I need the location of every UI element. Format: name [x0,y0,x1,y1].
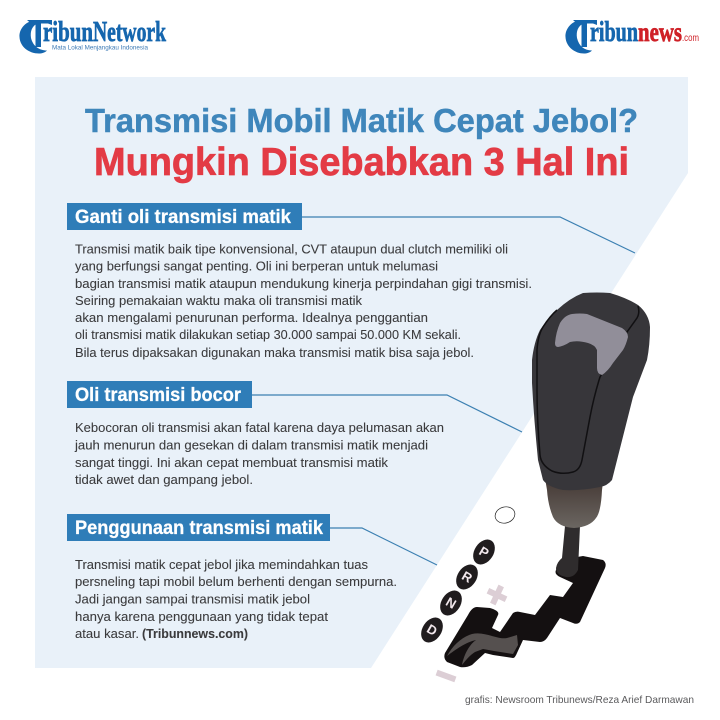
body text 3: Transmisi matik cepat jebol jika memindahkan tuas [75,557,368,572]
body text 1: yang berfungsi sangat penting. Oli ini berperan untuk melumasi [75,258,438,274]
body text 3: (Tribunnews.com) [142,626,248,641]
connector line 1 [302,217,635,253]
gear marking: D: D [424,621,440,639]
heading 2: Oli transmisi bocor [75,385,242,406]
body text 1: akan mengalami penurunan performa. Idealnya penggantian [75,310,428,325]
knob body [532,292,650,490]
knob seam [537,306,639,473]
body text 1: Seiring pemakaian waktu maka oli transmisi matik [75,293,363,308]
body text 3: hanya karena penggunaan yang tidak tepat [75,609,328,624]
heading 3: Penggunaan transmisi matik [75,518,323,539]
gear marking: N [436,587,466,619]
gear marking: P [469,536,499,568]
body text 2: tidak awet dan gampang jebol. [75,472,253,487]
body text 2: Kebocoran oli transmisi akan fatal karena daya pelumasan akan [75,420,444,435]
gear marking: P: P [476,543,492,561]
knob boot [545,478,603,528]
title [85,102,638,184]
heading 1: Ganti oli transmisi matik [75,207,291,228]
logo: TribunNetwork: Network [93,16,167,48]
logo: Tribunnews.com: news [638,17,682,47]
gear marking: R: R [459,568,475,586]
body text 2 [74,420,444,487]
plus sign [484,582,510,608]
section 1: ganti oli [67,203,635,360]
body text 1 [75,242,532,360]
shaft [556,526,580,577]
body text 3 [75,557,397,641]
slot highlight [447,633,518,665]
body text 1: bagian transmisi matik ataupun mendukung kinerja perpindahan gigi transmisi. [75,276,532,291]
section 2: oli bocor [67,381,522,487]
body text 2: sangat tinggi. Ini akan cepat membuat transmisi matik [75,455,389,470]
logo: Tribunnews.com: ribun [590,17,638,48]
logo: TribunNetwork: Mata Lokal Menjangkau Indonesia [52,44,148,52]
logo: Tribunnews.com [565,17,699,54]
gear marking: R [452,561,482,593]
illustration: gear shifter [417,292,650,682]
body text 3: persneling tapi mobil belum berhenti dengan sempurna. [75,574,397,589]
background panel [35,77,688,668]
logo: TribunNetwork [19,16,167,54]
gear slot [444,556,606,667]
gear marking: D [417,614,447,646]
logo: Tribunnews.com: .com [682,32,699,44]
logo: TribunNetwork: ribun [43,16,93,48]
credit: grafis: Newsroom Tribunews/Reza Arief Darmawan [465,694,694,706]
body text 3: Jadi jangan sampai transmisi matik jebol [75,592,310,606]
gear marking: N: N [443,594,459,612]
body text 3: atau kasar. [75,626,139,641]
body text 2: jauh menurun dan gesekan di dalam transmisi matik menjadi [74,438,428,452]
section 3: penggunaan [67,514,437,641]
title: Mungkin Disebabkan 3 Hal Ini [94,141,629,184]
gear marking: oval [493,505,517,525]
connector line 2 [252,395,522,432]
body text 1: oli transmisi matik dilakukan setiap 30.000 sampai 50.000 KM sekali. [75,327,461,342]
body text 1: Bila terus dipaksakan digunakan maka transmisi matik bisa saja jebol. [75,345,474,360]
connector line 3 [330,528,437,565]
knob gray patch [555,314,628,375]
minus sign [436,670,456,682]
body text 1: Transmisi matik baik tipe konvensional, CVT ataupun dual clutch memiliki oli [75,242,508,256]
title: Transmisi Mobil Matik Cepat Jebol? [85,102,638,139]
